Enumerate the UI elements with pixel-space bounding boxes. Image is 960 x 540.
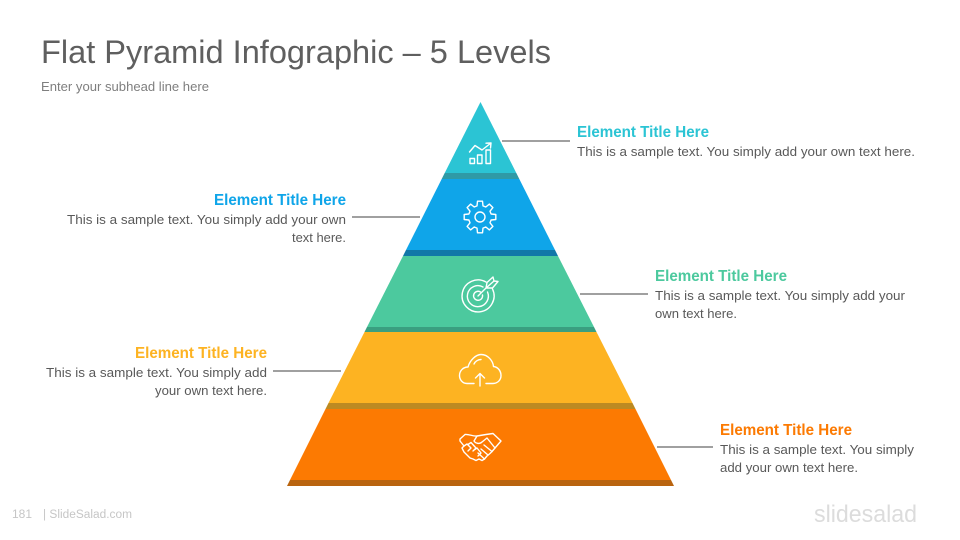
callout 5: Element Title Here — [720, 422, 852, 439]
callout 3 — [580, 268, 905, 321]
callout 3: This is a sample text. You simply add your — [655, 289, 905, 303]
level 3: green — [364, 256, 596, 332]
callout 5 — [657, 422, 915, 475]
callout 4: Element Title Here — [135, 345, 267, 362]
callout 2 — [67, 192, 420, 245]
callout 1: Element Title Here — [577, 124, 709, 141]
callout 1 — [502, 124, 915, 159]
title: Flat Pyramid Infographic – 5 Levels — [41, 34, 551, 70]
icon: gear — [464, 201, 496, 233]
callout 2: Element Title Here — [214, 192, 346, 209]
footer: page number: 181 — [12, 509, 32, 521]
pyramid — [287, 102, 674, 486]
footer: site: | SlideSalad.com — [43, 509, 132, 521]
icon: cloud upload — [460, 354, 501, 386]
level 1: teal — [442, 102, 519, 179]
icon: growth chart — [470, 143, 491, 164]
level 5: orange — [287, 409, 674, 486]
callout 3: own text here. — [655, 307, 737, 321]
callout 1: This is a sample text. You simply add your own text here. — [577, 145, 915, 159]
callout 5: This is a sample text. You simply — [720, 443, 915, 457]
callout 4: This is a sample text. You simply add — [46, 366, 267, 380]
callout 5: add your own text here. — [720, 461, 858, 475]
logo: slidesalad — [814, 501, 917, 528]
icon: target with arrow — [462, 277, 498, 312]
icon: handshake — [460, 434, 501, 460]
level 2: blue — [403, 179, 558, 256]
callout 2: This is a sample text. You simply add your own — [67, 213, 346, 227]
subhead: Enter your subhead line here — [41, 80, 209, 94]
callout 4 — [46, 345, 341, 398]
callout 4: your own text here. — [155, 384, 267, 398]
callout 2: text here. — [292, 231, 346, 245]
level 4: yellow — [326, 332, 636, 409]
callout 3: Element Title Here — [655, 268, 787, 285]
